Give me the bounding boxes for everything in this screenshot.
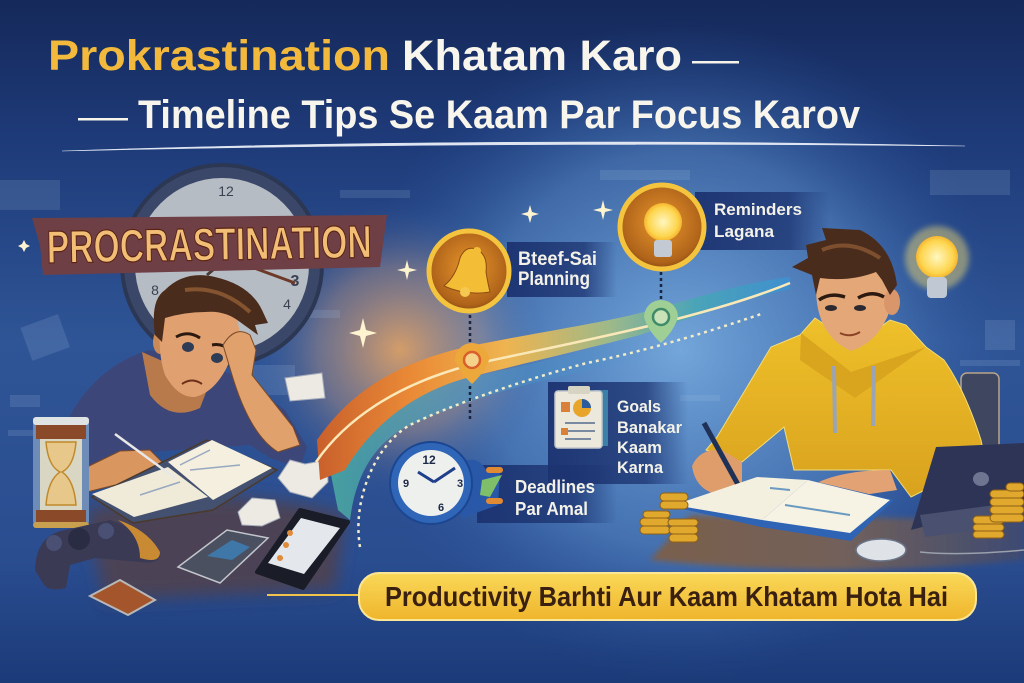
road highlight line — [316, 283, 790, 462]
title: Timeline Tips Se Kaam Par Focus Karov — [138, 93, 861, 137]
icon: alarm clock: 12 — [422, 453, 436, 467]
hood folds — [800, 333, 926, 398]
left student writing arm — [87, 450, 168, 492]
title: Prokrastination — [48, 32, 390, 80]
wall clock: 4 — [283, 296, 291, 312]
reminders label: Lagana — [714, 222, 775, 241]
desk left — [85, 496, 345, 600]
icon: alarm clock: 3 — [457, 478, 463, 490]
open notebook right — [674, 477, 894, 541]
goals label panel — [548, 382, 688, 484]
deadlines label: Par Amal — [515, 499, 588, 519]
milestone: reminders — [620, 185, 830, 343]
open notebook left — [92, 434, 277, 523]
goals label panel: Goals — [617, 397, 661, 416]
icon: clipboard — [555, 386, 608, 448]
icon: lightbulb — [620, 185, 704, 269]
wall clock — [122, 165, 322, 365]
title: Khatam Karo — [402, 32, 682, 80]
goals label panel: Banakar — [617, 418, 682, 437]
goals label panel: Karna — [617, 458, 664, 477]
timeline road — [316, 277, 790, 547]
pen — [704, 423, 741, 490]
left student body — [52, 350, 307, 495]
resting hand — [802, 470, 897, 508]
chair — [961, 373, 999, 453]
hourglass — [33, 417, 89, 528]
callout: productivity: Productivity Barhti Aur Kaam Khatam Hota Hai — [385, 581, 948, 612]
milestone: deadlines — [390, 442, 617, 524]
left student raised arm — [223, 332, 300, 452]
reminders label — [695, 192, 830, 250]
hoodie torso and sleeves — [706, 318, 985, 497]
gold coins — [640, 483, 1024, 542]
reminders label: Reminders — [714, 200, 802, 219]
marker: green pin — [644, 300, 678, 343]
road dotted line — [358, 313, 764, 547]
left student neck — [142, 352, 210, 413]
bell label: Bteef-Sai — [518, 249, 597, 270]
bell label: Planning — [518, 269, 590, 290]
head — [792, 228, 900, 351]
wall clock: 3 — [291, 273, 300, 290]
icon: alarm clock: 9 — [403, 478, 409, 490]
hood strings — [834, 366, 874, 433]
desk right — [650, 515, 1024, 570]
title underline — [62, 142, 965, 151]
right student — [692, 228, 985, 508]
computer mouse — [856, 539, 1024, 561]
icon: alarm clock — [390, 442, 503, 524]
icon: glowing bulb — [905, 226, 969, 298]
goals label panel: Kaam — [617, 438, 662, 457]
phone and tablet — [178, 510, 348, 588]
road lower teal band — [330, 335, 650, 520]
left student — [52, 275, 307, 495]
wall clock: 8 — [151, 282, 159, 298]
laptop — [911, 443, 1024, 537]
crumpled papers — [238, 373, 328, 526]
callout: productivity — [267, 573, 976, 620]
title — [48, 32, 861, 137]
marker: orange pin — [455, 343, 489, 384]
hand writing — [692, 450, 742, 494]
left student head — [153, 275, 268, 397]
milestone: bell planning — [429, 231, 617, 420]
deadlines label: Deadlines — [515, 477, 595, 497]
bell label — [507, 242, 617, 297]
icon: alarm clock: 6 — [438, 502, 444, 514]
deadlines label — [477, 465, 617, 523]
banner: procrastination: PROCRASTINATION — [46, 215, 372, 273]
road main band — [317, 277, 790, 480]
chocolate bar — [90, 580, 155, 615]
milestone: goals — [548, 382, 688, 484]
game controller — [35, 520, 160, 589]
wall clock: 12 — [218, 183, 234, 199]
icon: bell — [429, 231, 509, 311]
